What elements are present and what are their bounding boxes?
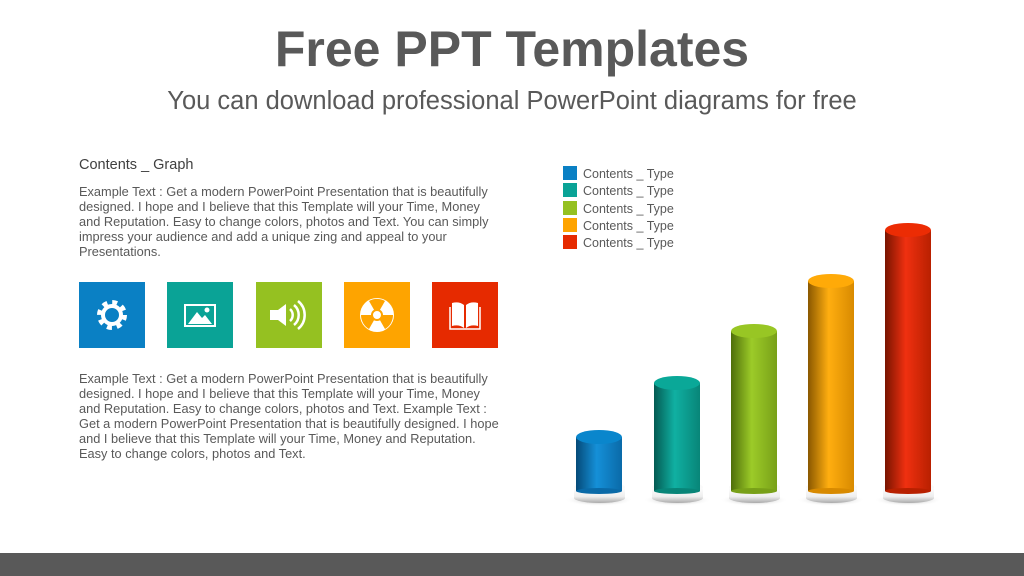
bar 3 green bbox=[720, 324, 788, 506]
icon: speaker bbox=[256, 282, 322, 348]
text block 1: Example Text : Get a modern PowerPoint Presentation that is beautifully designed. I hope and I believe that this Template will your Time, Money and Reputation. Easy to change colors, photos and Text. You can simply impress your audience and add a unique zing and appeal to your Presentations. bbox=[79, 184, 489, 259]
subtitle: You can download professional PowerPoint diagrams for free bbox=[167, 87, 857, 115]
legend: Contents _ Type bbox=[583, 167, 674, 181]
icon row bbox=[79, 282, 498, 348]
icon: book bbox=[432, 282, 498, 348]
heading: contents graph: Contents _ Graph bbox=[79, 157, 193, 173]
legend: Contents _ Type bbox=[583, 236, 674, 250]
legend: Contents _ Type bbox=[583, 202, 674, 216]
legend: Contents _ Type bbox=[583, 184, 674, 198]
bar 2 teal bbox=[643, 376, 711, 506]
bar 5 red bbox=[874, 223, 942, 506]
bar 1 blue bbox=[565, 430, 633, 506]
title: Free PPT Templates bbox=[275, 21, 749, 77]
text block 2: Example Text : Get a modern PowerPoint Presentation that is beautifully designed. I hope and I believe that this Template will your Time, Money and Reputation. Easy to change colors, photos and Text. Example Text : Get a modern PowerPoint Presentation that is beautifully designed. I hope and I believe that this Template will your Time, Money and Reputation. Easy to change colors, photos and Text. bbox=[79, 371, 499, 461]
bar 4 orange bbox=[797, 274, 865, 506]
icon: radiation bbox=[344, 282, 410, 348]
icon: picture bbox=[167, 282, 233, 348]
legend: Contents _ Type bbox=[583, 219, 674, 233]
icon: gear bbox=[79, 282, 145, 348]
legend bbox=[563, 166, 674, 250]
footer bar bbox=[0, 553, 1024, 576]
